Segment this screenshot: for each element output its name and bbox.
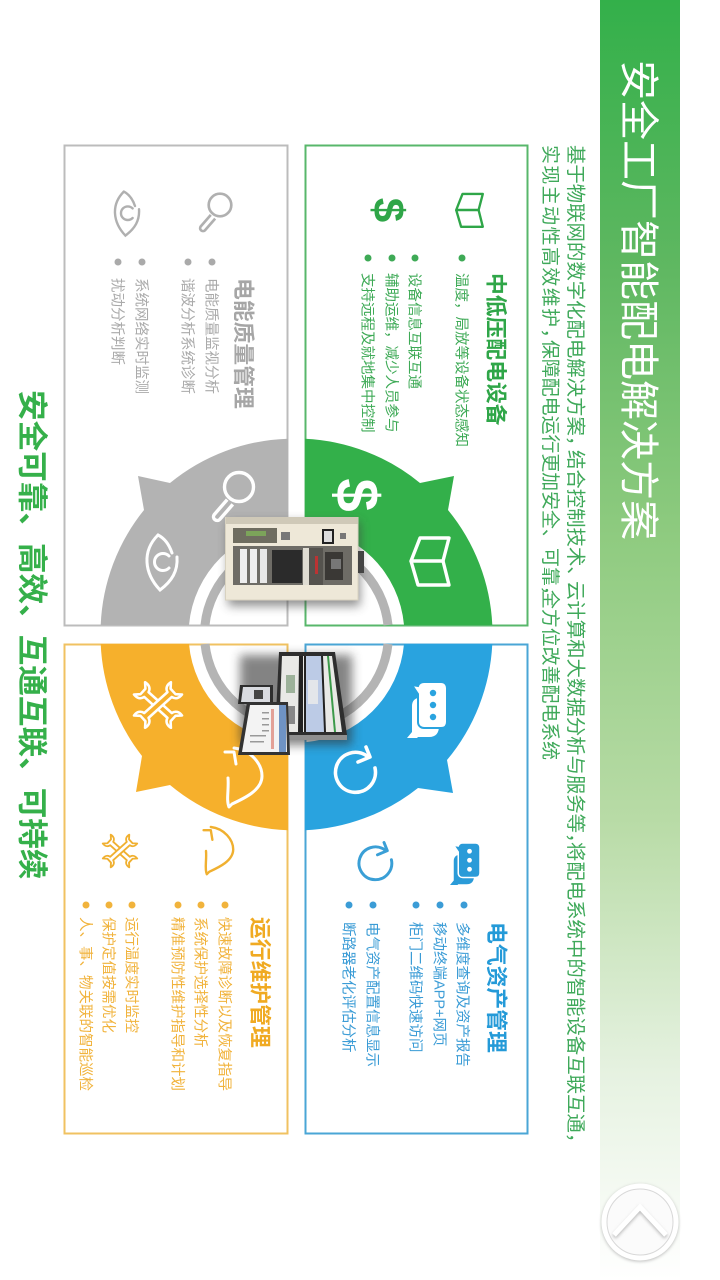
- icon: wrenches: [103, 835, 137, 867]
- sector: blue: [305, 644, 492, 830]
- panel: 中低压配电设备: [306, 146, 528, 626]
- back button: [602, 1184, 678, 1262]
- panel: 电能质量管理: [64, 146, 288, 626]
- bullet list: [358, 254, 470, 447]
- intro paragraph: 全方位改善配电系统: [539, 590, 561, 760]
- icon: refresh white: [335, 747, 375, 792]
- bullet list: 辅助运维，减少人员参与: [382, 273, 400, 432]
- panel: 电气资产管理: [306, 644, 528, 1134]
- bullet list: 精准预防性维护指导和计划: [168, 917, 186, 1091]
- intro paragraph: 实现主动性高效维护，: [539, 145, 561, 349]
- bullet list: 电能质量监视分析: [202, 278, 220, 394]
- bullet list: 断路器老化评估分析: [340, 922, 356, 1052]
- icon: chat: [450, 843, 480, 885]
- sector: orange: [101, 644, 288, 830]
- heading: 运行维护管理: [248, 917, 272, 1048]
- intro paragraph: 可靠，: [539, 548, 561, 605]
- icon: chat white: [407, 682, 447, 738]
- icon: wrenches white: [134, 682, 182, 728]
- bullet list: [108, 258, 220, 394]
- icon: eye: [115, 192, 139, 236]
- icon: magnifier white: [213, 472, 254, 520]
- bullet list: 多维度查询及资产报告: [454, 922, 470, 1067]
- bullet list: [340, 902, 470, 1067]
- bullet list: 设备信息互联互通: [406, 273, 422, 389]
- icon: eye white: [147, 535, 177, 590]
- bullet list: 保护定值按需优化: [100, 917, 116, 1033]
- header bar: [600, 0, 680, 1280]
- title: 安全工厂智能配电解决方案: [616, 60, 660, 540]
- bullet list: 扰动分析判断: [108, 278, 126, 365]
- bullet list: 人、事、物关联的智能巡检: [76, 917, 94, 1091]
- icon: helmet white: [225, 748, 262, 807]
- heading: 中低压配电设备: [484, 273, 508, 426]
- heading: 电能质量管理: [231, 278, 256, 409]
- bullet list: 快速故障诊断以及恢复指导: [216, 917, 234, 1091]
- icon: book white: [411, 538, 449, 585]
- panel: 运行维护管理: [64, 644, 288, 1134]
- bullet list: 移动终端APP+网页: [430, 922, 448, 1046]
- sector: green: [305, 439, 492, 625]
- bullet list: 电气资产配置信息显示: [364, 922, 380, 1067]
- intro paragraph: 基于物联网的数字化配电解决方案，: [564, 145, 586, 455]
- gray ring: [205, 543, 388, 726]
- product: switchgear cabinet: [226, 517, 364, 606]
- heading: 电气资产管理: [484, 922, 509, 1053]
- intro paragraph: 将配电系统中的智能设备互联互通，: [564, 842, 586, 1152]
- medium tablet: [238, 702, 290, 755]
- bullet list: 温度，局放等设备状态感知: [452, 273, 470, 447]
- small tablet: [238, 685, 273, 704]
- bullet list: 谐波分析系统诊断: [178, 278, 196, 394]
- intro paragraph: 云计算和大数据分析与服务等，: [564, 581, 586, 852]
- icon: helmet: [204, 827, 233, 874]
- bullet list: 柜门二维码快速访问: [406, 922, 424, 1052]
- icon: magnifier: [200, 194, 231, 231]
- bullet list: 系统网络实时监测: [132, 278, 150, 394]
- intro paragraph: 保障配电运行更加安全、: [539, 340, 561, 548]
- slogan: 安全可靠、高效、互通互联、可持续: [14, 390, 48, 880]
- sector: gray: [101, 439, 288, 625]
- intro paragraph: 结合控制技术、: [564, 450, 586, 586]
- big tablet: [275, 652, 347, 740]
- intro paragraph: [539, 145, 586, 1152]
- bullet list: 运行温度实时监控: [122, 917, 140, 1033]
- icon: book: [456, 194, 483, 227]
- bullet list: 支持远程及就地集中控制: [358, 273, 376, 432]
- bullet list: [76, 902, 234, 1091]
- icon: refresh: [359, 842, 392, 880]
- icon: dollar white: $: [324, 478, 390, 512]
- icon: dollar: $: [364, 198, 412, 222]
- bullet list: 系统保护选择性分析: [192, 917, 208, 1048]
- product: tablets: [238, 652, 352, 755]
